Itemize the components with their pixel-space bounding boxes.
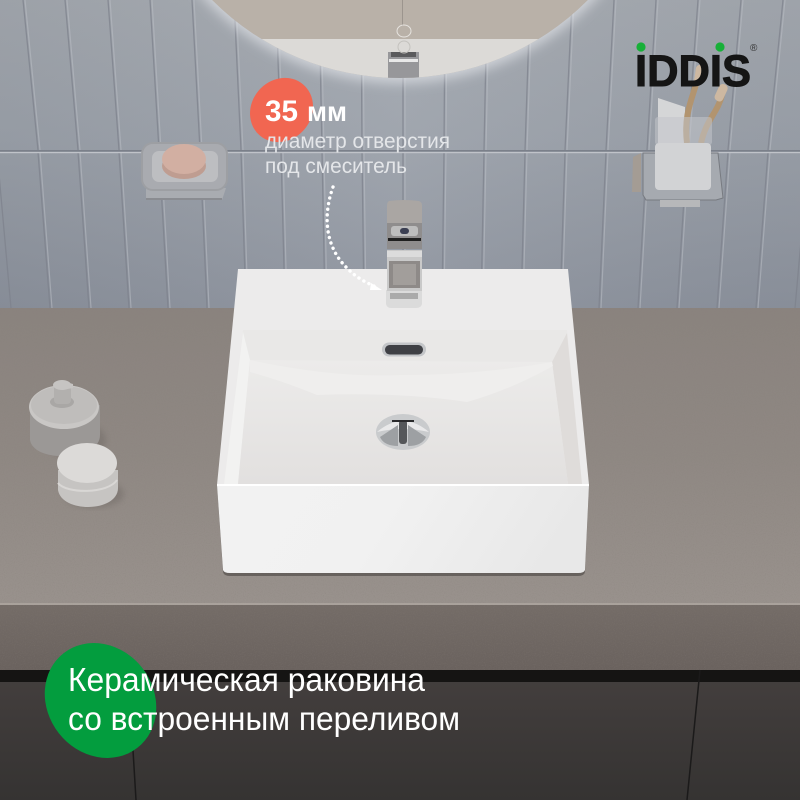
logo dot right: [715, 42, 725, 52]
unit: мм: [307, 96, 347, 127]
mirror with glow: [198, 0, 602, 90]
soap dish: [142, 143, 227, 200]
sink front wall: [217, 485, 589, 573]
callout arrow: dotted: [327, 187, 382, 290]
registered mark: ®: [750, 43, 758, 54]
toothbrush cup: [632, 64, 729, 207]
title block: [22, 621, 460, 780]
logo: IDDIS: IDDIS: [635, 47, 751, 96]
callout: 35 mm: [237, 65, 456, 178]
green blob: [22, 621, 179, 780]
sink: [217, 269, 589, 576]
title text: со встроенным переливом: [68, 700, 460, 737]
drain: [376, 414, 430, 450]
title text: Керамическая раковина: [68, 661, 426, 698]
cosmetic jar: [57, 443, 124, 508]
sink deck: [217, 269, 589, 485]
soap dispenser: [29, 380, 106, 458]
logo dot left: [636, 42, 646, 52]
faucet base: [386, 290, 422, 308]
faucet handle: [387, 200, 422, 240]
caption: диаметр отверстия: [265, 130, 450, 153]
background: tiled wall: [0, 0, 800, 308]
faucet: [386, 200, 422, 308]
value: 35: [265, 95, 298, 128]
countertop: [0, 308, 800, 605]
countertop front edge: [0, 605, 800, 670]
red blob: [237, 65, 326, 155]
faucet body: [387, 250, 422, 291]
cabinet fronts: [0, 670, 800, 800]
overflow opening: [382, 342, 426, 356]
sink basin: [224, 330, 582, 484]
caption: под смеситель: [265, 155, 407, 178]
